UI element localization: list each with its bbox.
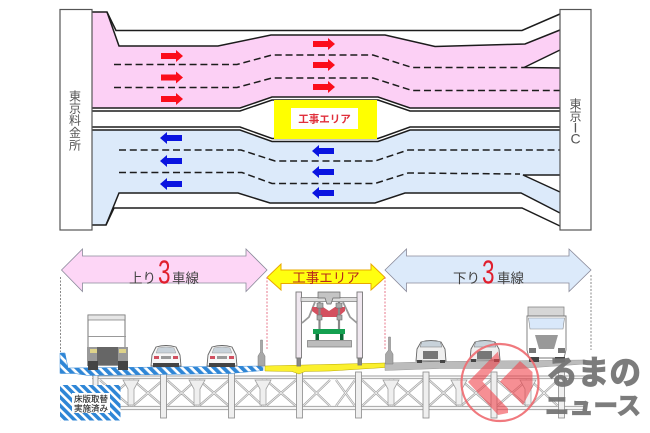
span arrow: downbound 3 lanes: 3 [482,254,494,290]
deck: grey downbound section [385,360,585,370]
gantry crane [296,292,362,366]
deck: hatched completed section [60,353,263,376]
red arrows: upbound direction [161,38,335,105]
green lifting beam [313,329,345,334]
dashed span guides [60,275,591,352]
span arrow: upbound 3 lanes [62,249,267,292]
Tokyo IC box: 京 [569,110,582,124]
lane dashes [114,55,560,184]
green beam legs [316,334,344,340]
Tokyo toll gate box: 所 [69,138,81,152]
span arrow: upbound 3 lanes: 3 [158,254,170,290]
Tokyo toll gate box: 京 [69,102,81,116]
blue arrows: downbound direction [160,132,334,199]
Tokyo toll gate box: 金 [69,126,81,140]
watermark circle mark [462,344,538,421]
panel: downbound lanes (blue) [92,130,560,225]
span arrow: downbound 3 lanes [385,249,591,292]
watermark subtitle: ニュース [545,393,641,420]
Tokyo IC box: 東 [569,98,582,112]
Tokyo IC box: C [570,130,581,146]
truck left, rear view [87,315,128,370]
Tokyo toll gate box [60,10,92,230]
car, rear view 2 [207,346,237,367]
Tokyo IC box [560,10,591,230]
hoist wires [320,302,339,329]
hatch legend: deck replacement done: 床版取替 [74,394,108,404]
deck: yellow work section [265,363,385,374]
steel truss girder [92,372,585,418]
span arrow: downbound 3 lanes: 下り [453,271,480,286]
car, front view 2 [470,340,500,362]
median barriers [258,337,393,366]
plan view road diagram [60,10,591,230]
watermark wordmark: るまの [546,354,641,391]
hatch legend: deck replacement done [60,385,120,420]
span arrow: work area: 工事エリア [292,270,360,286]
span arrow: downbound 3 lanes: 車線 [497,271,524,286]
span arrow: work area [267,264,385,290]
car, rear view 1 [151,346,181,367]
span arrow: upbound 3 lanes: 上り [129,271,156,286]
cross-section diagram [60,249,591,420]
red frame [312,307,345,317]
bridge piers [93,372,564,418]
work area label [291,108,358,129]
car, front view 1 [416,340,446,363]
crane columns [296,292,362,366]
Tokyo toll gate box: 東 [69,90,81,104]
work area label: 工事エリア [298,112,351,126]
panel: upbound lanes (pink) [92,12,560,108]
truss gussets [123,380,536,405]
hoist mechanism [318,292,340,304]
road outlines [92,12,560,226]
crane braces [302,302,357,323]
Tokyo toll gate box: 料 [69,114,81,128]
watermark logo [462,344,641,421]
span arrow: upbound 3 lanes: 車線 [172,271,199,286]
hatch legend: deck replacement done: 実施済み [74,404,108,414]
deck slab [308,340,352,347]
crane beam [301,298,357,302]
work area yellow block [274,100,377,139]
Tokyo IC box: I [574,120,577,136]
truck right, front view [527,307,566,362]
